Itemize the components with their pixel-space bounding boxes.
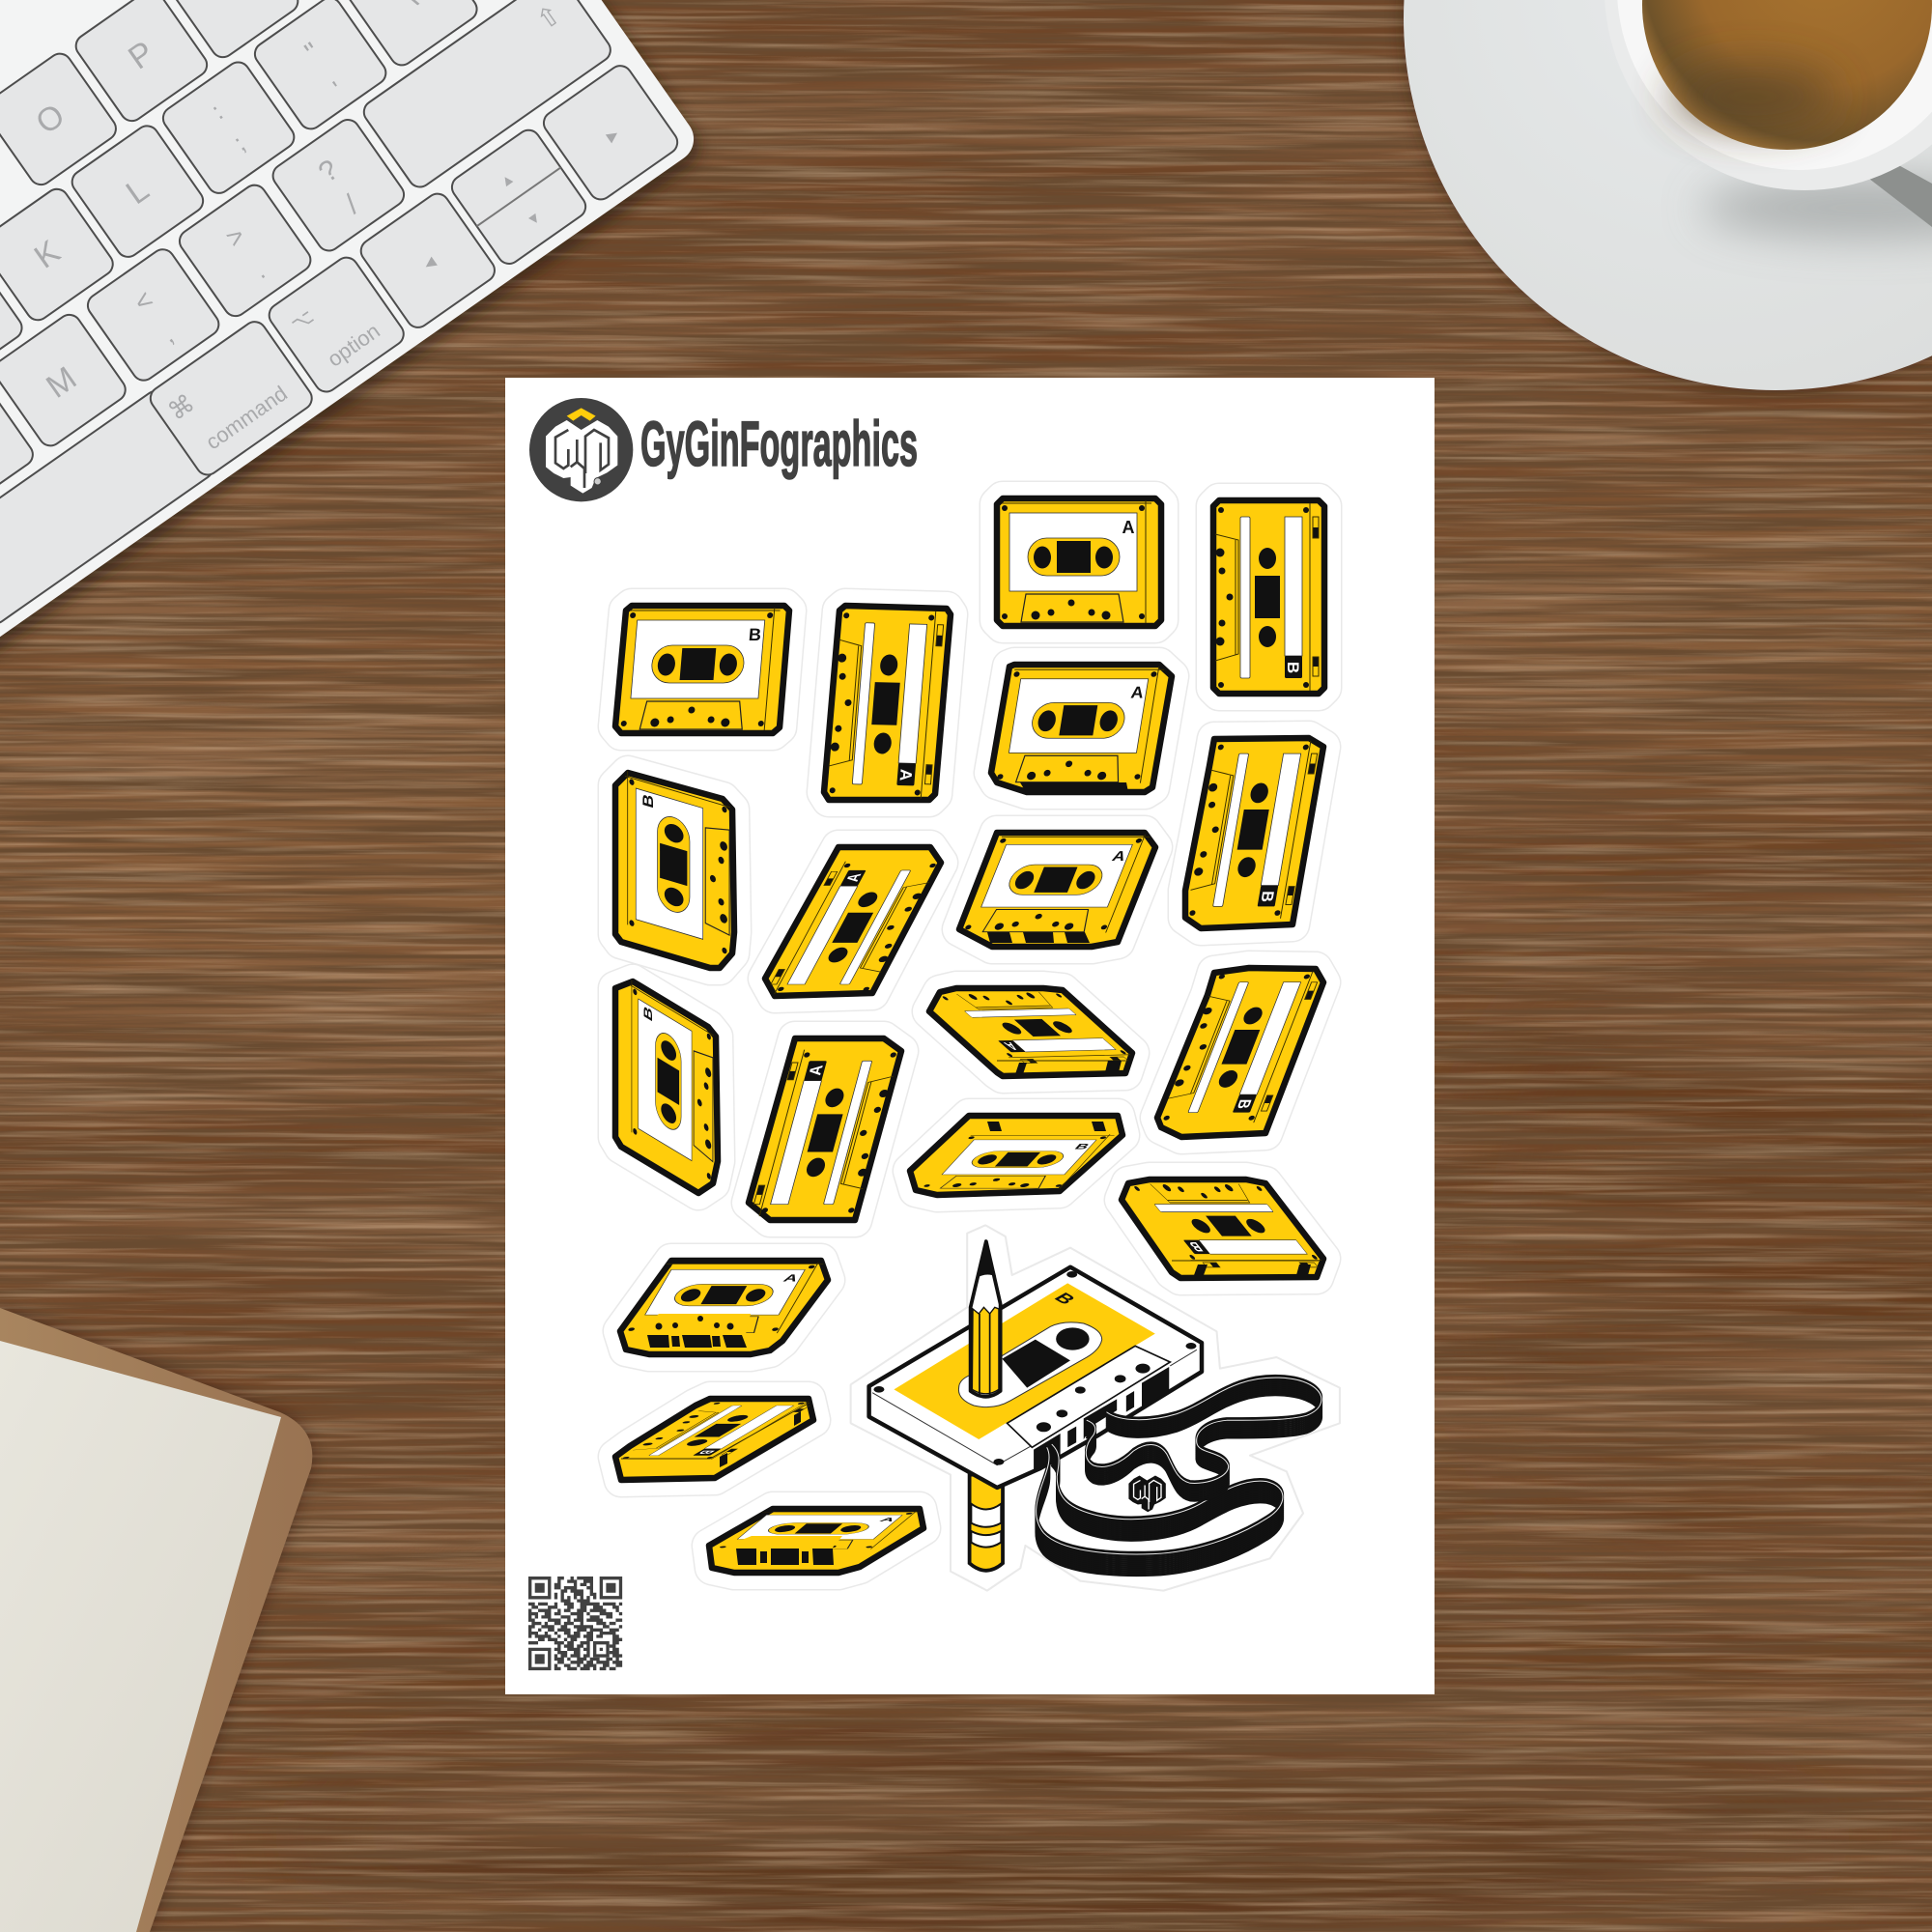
logo badge: [529, 398, 633, 501]
sticker: cassette B strip side from low angle: B: [695, 1450, 720, 1454]
sticker: cassette A upright: A: [1122, 518, 1134, 537]
key legends: [0, 0, 655, 512]
sticker: cassette A strip side inverted: [749, 1038, 901, 1220]
tape loops: [1037, 1376, 1321, 1576]
pencil upper part: [971, 1241, 1001, 1397]
QR code: [528, 1577, 622, 1670]
key legends: ;: [228, 128, 250, 156]
sticker: cassette A low angle with spine: A: [781, 1273, 801, 1284]
pencil lower part: [970, 1475, 1003, 1571]
coffee cup and saucer: [1401, 0, 1932, 393]
sticker: cassette B strip side tilted steep: [1157, 968, 1323, 1137]
key legends: ▴: [497, 169, 516, 190]
sticker: cassette B seen from low angle: [910, 1116, 1122, 1195]
sticker: cassette B strip side upright: [1213, 500, 1324, 694]
key legends: ⌥: [288, 306, 318, 336]
cup handle: [1869, 162, 1932, 227]
sticker: cassette A tilted with spine: A: [1129, 683, 1146, 701]
sticker: cassette A strip side lying flat: [929, 988, 1137, 1076]
sticker: cassette B strip side tilted: [1185, 738, 1323, 928]
sticker: cassette B strip side tilted steep: B: [1233, 1099, 1254, 1109]
sticker: cassette A lowest angle with spine: [709, 1509, 923, 1573]
sticker: cassette B strip side upright: B: [1284, 662, 1302, 673]
sticker: cassette B leaning: [615, 606, 789, 733]
sticker: cassette A tilted with spine: [991, 665, 1172, 792]
sticker: cassette A upright: [997, 498, 1161, 626]
sticker: cassette A strip side leaning: A: [896, 769, 916, 781]
key legends: M: [40, 359, 83, 406]
key legends: ▾: [525, 208, 543, 229]
key legends: /: [340, 189, 365, 220]
key legends: ': [327, 75, 349, 102]
sticker: cassette A tilted perspective: A: [1110, 848, 1128, 865]
sticker: cassette A lowest angle with spine: A: [877, 1517, 897, 1522]
sticker: cassette A strip side steep: [765, 847, 941, 996]
sticker sheet paper: [505, 378, 1435, 1694]
key legends: ": [299, 37, 327, 69]
key legends: ◂: [418, 249, 440, 275]
sticker: cassette A strip side inverted: A: [806, 1065, 827, 1075]
keyboard: [0, 0, 708, 934]
sticker: cassette A strip side steep: A: [843, 873, 866, 882]
key legends: .: [247, 257, 270, 284]
key legends: :: [206, 98, 228, 125]
sticker: cassette B leaning: B: [748, 625, 762, 644]
sticker: cassette A strip side leaning: [824, 606, 951, 800]
key legends: ?: [313, 154, 345, 189]
logo wordmark: GyGinFographics: [640, 408, 918, 479]
key legends: P: [122, 34, 161, 76]
key legends: ⌘: [162, 388, 200, 426]
sticker: cassette B rotated sideways: [615, 770, 734, 968]
sticker: cassette B seen from low angle: B: [1071, 1143, 1092, 1151]
sticker: cassette B strip side lying flat: [1122, 1179, 1327, 1278]
sticker: cassette A tilted perspective: [959, 833, 1155, 947]
key legends: ,: [156, 321, 179, 349]
head block: [1008, 1346, 1170, 1471]
cup: [1605, 0, 1932, 190]
sticker: cassette B skewed sideways: B: [642, 1004, 655, 1024]
key legends: command: [201, 381, 292, 454]
key legends: option: [323, 319, 384, 372]
saucer: [1401, 0, 1932, 393]
cassette body: [869, 1267, 1202, 1488]
key legends: K: [28, 233, 67, 276]
sticker: cassette B rotated sideways: B: [639, 792, 657, 810]
key legends: O: [29, 97, 71, 142]
sticker: cassette B strip side tilted: B: [1257, 891, 1278, 902]
notebook: [0, 1308, 312, 1932]
key legends: >: [220, 220, 250, 253]
sticker backing: [851, 1225, 1340, 1591]
key legends: ▸: [601, 122, 623, 148]
sticker: cassette B strip side from low angle: [615, 1399, 817, 1480]
sticker: cassette B skewed sideways: [615, 979, 718, 1193]
side B letter: B: [1049, 1291, 1080, 1307]
sticker: cassette A strip side lying flat: A: [999, 1039, 1021, 1052]
key legends: L: [120, 171, 156, 212]
sticker: cassette A low angle with spine: [620, 1261, 828, 1354]
small logo mark: [1128, 1475, 1166, 1512]
sticker: cassette B strip side lying flat: B: [1185, 1238, 1206, 1254]
main sticker: cassette with pencil and loose tape: [851, 1225, 1340, 1591]
key legends: <: [128, 284, 158, 318]
